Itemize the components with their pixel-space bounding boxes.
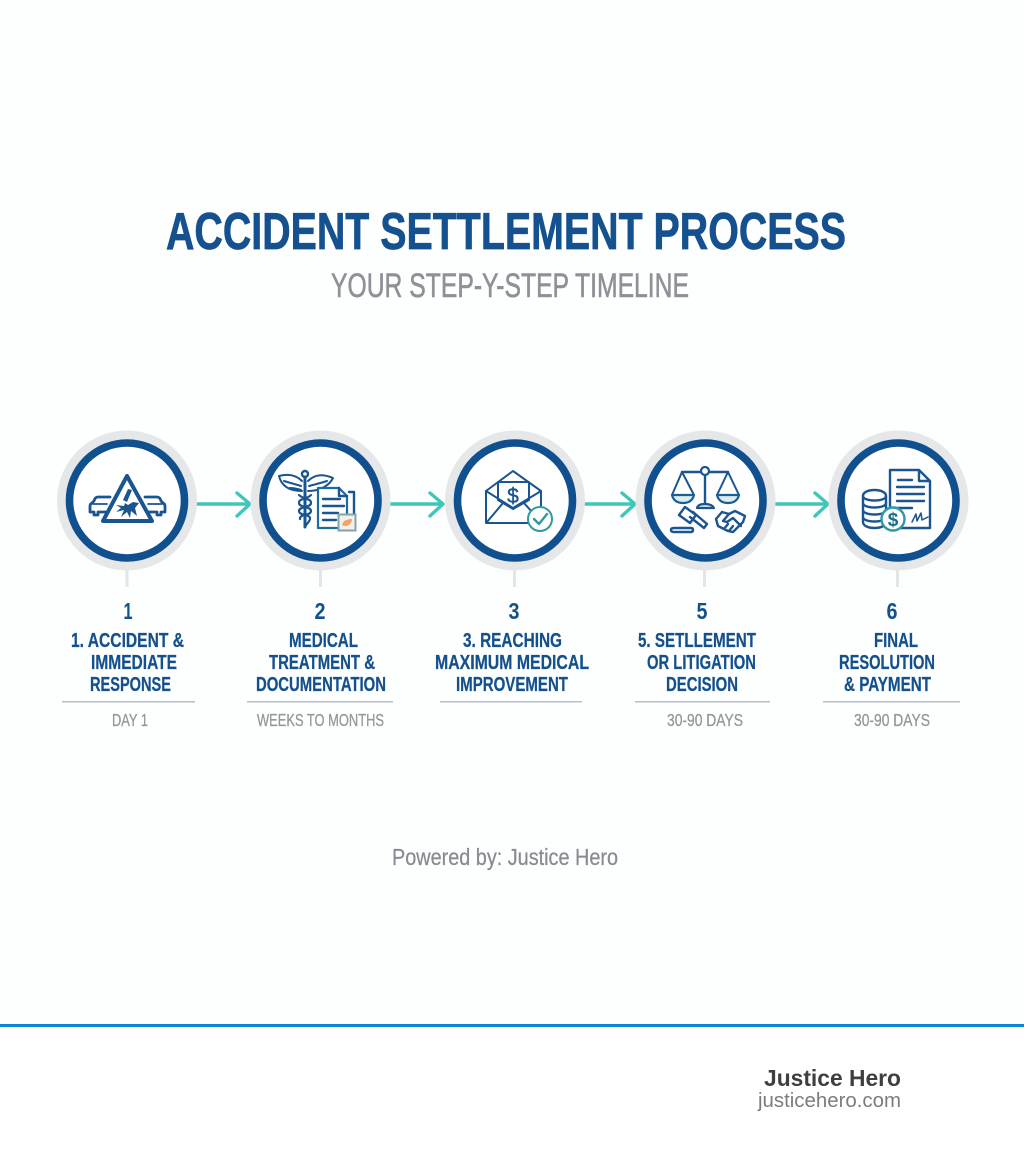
step 3 node — [445, 430, 585, 587]
footer — [0, 1024, 1024, 1154]
step 6 text — [823, 598, 960, 730]
step 2 text: DOCUMENTATION — [256, 674, 386, 696]
footer website: justicehero.com — [757, 1090, 901, 1112]
icon: caduceus and medical document — [279, 471, 356, 530]
step 6 text: 30-90 DAYS — [854, 710, 930, 730]
step 1 node — [57, 430, 197, 587]
arrow: step 1 to step 2 — [197, 493, 250, 516]
step 2 text: MEDICAL — [289, 630, 358, 652]
step 3 text: MAXIMUM MEDICAL — [435, 652, 589, 674]
footer brand name: Justice Hero — [764, 1065, 901, 1091]
step 2 text: TREATMENT & — [269, 652, 375, 674]
step 5 text — [635, 598, 770, 730]
step 6 text: FINAL — [874, 630, 918, 652]
icon: coins, dollar badge and signed document — [863, 470, 930, 531]
step 5 text: 5. SETLLEMENT — [638, 630, 756, 652]
step 6 text: & PAYMENT — [844, 674, 931, 696]
step 4 node — [636, 430, 776, 587]
subtitle: YOUR STEP-Y-STEP TIMELINE — [331, 267, 689, 305]
step 1 text: RESPONSE — [90, 674, 171, 696]
step 1 text — [62, 598, 195, 730]
step 3 text: IMPROVEMENT — [456, 674, 568, 696]
step 1 text: 1 — [124, 598, 133, 624]
step 5 text: DECISION — [666, 674, 738, 696]
step 6 text: 6 — [886, 598, 898, 624]
step 2 node — [250, 430, 390, 587]
arrow: step 4 to step 5 — [776, 493, 828, 516]
icon: settlement envelope with check: $ — [507, 485, 519, 508]
step 6 text: RESOLUTION — [839, 652, 935, 674]
step 2 text: 2 — [314, 598, 326, 624]
step 5 text: 30-90 DAYS — [667, 710, 743, 730]
arrow: step 3 to step 4 — [585, 493, 635, 516]
icon: settlement envelope with check — [486, 471, 552, 531]
arrow: step 2 to step 3 — [390, 493, 443, 516]
step 1 text: DAY 1 — [112, 710, 148, 730]
icon: scales, gavel and handshake — [671, 467, 745, 532]
step 1 text: 1. ACCIDENT & — [71, 630, 184, 652]
step 5 text: OR LITIGATION — [647, 652, 756, 674]
step 5 text: 5 — [696, 598, 708, 624]
step 2 text — [247, 598, 393, 730]
icon: coins, dollar badge and signed document: $ — [888, 510, 899, 531]
step 3 text — [435, 598, 589, 702]
powered by line: Powered by: Justice Hero — [392, 844, 618, 870]
icon: car crash warning — [90, 476, 165, 521]
step 5 node — [828, 430, 968, 587]
step 3 text: 3. REACHING — [463, 630, 562, 652]
step 2 text: WEEKS TO MONTHS — [257, 710, 384, 730]
step 1 text: IMMEDIATE — [91, 652, 177, 674]
step 3 text: 3 — [508, 598, 520, 624]
